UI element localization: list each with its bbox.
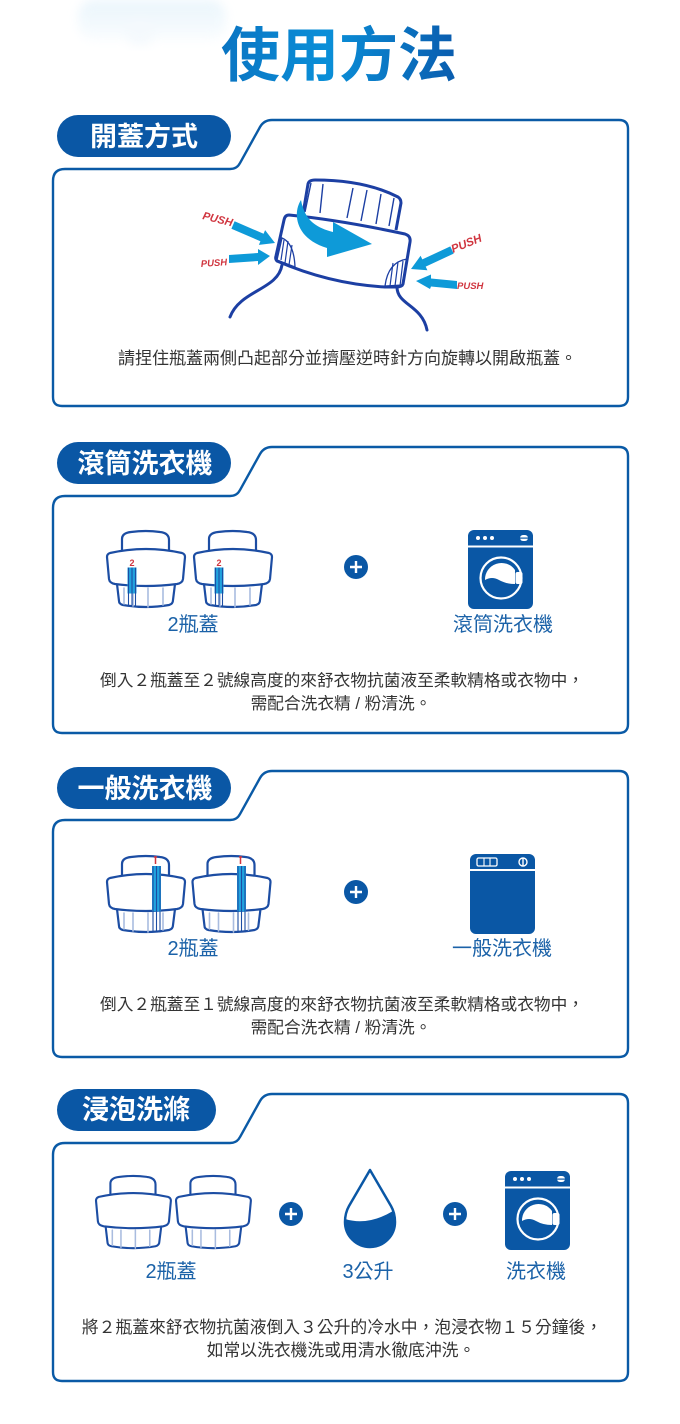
heading pill: open cap: 開蓋方式 (90, 121, 198, 152)
heading pill: regular washer: 一般洗衣機 (78, 774, 212, 804)
icon: water drop three litres (344, 1170, 396, 1247)
icon: two caps (96, 1176, 251, 1248)
illustration: squeezing and rotating the bottle cap: PUSH (201, 210, 235, 230)
icon: plus (344, 555, 368, 579)
illustration: squeezing and rotating the bottle cap: PUSH (457, 281, 485, 292)
heading pill: soak wash (57, 1089, 216, 1131)
panel: soak wash (53, 1089, 628, 1381)
label: two caps: 2瓶蓋 (167, 937, 219, 960)
label: regular washer: 一般洗衣機 (452, 937, 552, 960)
icon: drum washer (468, 530, 533, 609)
icon: plus (443, 1202, 467, 1226)
instruction text: soak wash: 將２瓶蓋來舒衣物抗菌液倒入３公升的冷水中，泡浸衣物１５分鐘後， (82, 1318, 602, 1337)
icon: two caps filled to line 2: 2 (129, 558, 135, 568)
heading pill: drum washer (57, 442, 231, 484)
icon: two caps filled to line 2 (107, 531, 272, 607)
icon: washer (505, 1171, 570, 1250)
icon: two caps filled to line 1 (107, 856, 270, 932)
icon: plus (279, 1202, 303, 1226)
panel: drum washer (53, 442, 628, 733)
icon: two caps filled to line 2: 2 (216, 558, 222, 568)
label: drum washer: 滾筒洗衣機 (453, 613, 553, 636)
illustration: squeezing and rotating the bottle cap: PUSH (450, 232, 484, 256)
label: two caps: 2瓶蓋 (145, 1260, 197, 1283)
illustration: squeezing and rotating the bottle cap (200, 180, 485, 330)
icon: plus (344, 880, 368, 904)
instruction text: drum washer: 倒入２瓶蓋至２號線高度的來舒衣物抗菌液至柔軟精格或衣物中， (100, 671, 584, 690)
instruction text: open cap: 請捏住瓶蓋兩側凸起部分並擠壓逆時針方向旋轉以開啟瓶蓋。 (118, 349, 577, 368)
icon: regular washer (470, 854, 535, 934)
heading pill: soak wash: 浸泡洗滌 (82, 1095, 190, 1125)
decorative faded background image (78, 0, 226, 46)
illustration: squeezing and rotating the bottle cap: PUSH (200, 257, 229, 270)
heading pill: drum washer: 滾筒洗衣機 (78, 449, 212, 479)
label: washer: 洗衣機 (506, 1260, 566, 1283)
heading pill: regular washer (57, 767, 231, 809)
instruction text: regular washer: 需配合洗衣精 / 粉清洗。 (251, 1018, 431, 1037)
panel: regular washer (53, 767, 628, 1057)
label: three litres: 3公升 (342, 1260, 394, 1283)
instruction text: regular washer: 倒入２瓶蓋至１號線高度的來舒衣物抗菌液至柔軟精格或衣物中， (100, 995, 584, 1014)
panel: how to open the cap (53, 115, 628, 406)
label: two caps: 2瓶蓋 (167, 613, 219, 636)
title: 使用方法 (221, 23, 457, 89)
instruction text: drum washer: 需配合洗衣精 / 粉清洗。 (251, 694, 431, 713)
heading pill: open cap (57, 115, 231, 157)
instruction text: soak wash: 如常以洗衣機洗或用清水徹底沖洗。 (207, 1341, 475, 1360)
